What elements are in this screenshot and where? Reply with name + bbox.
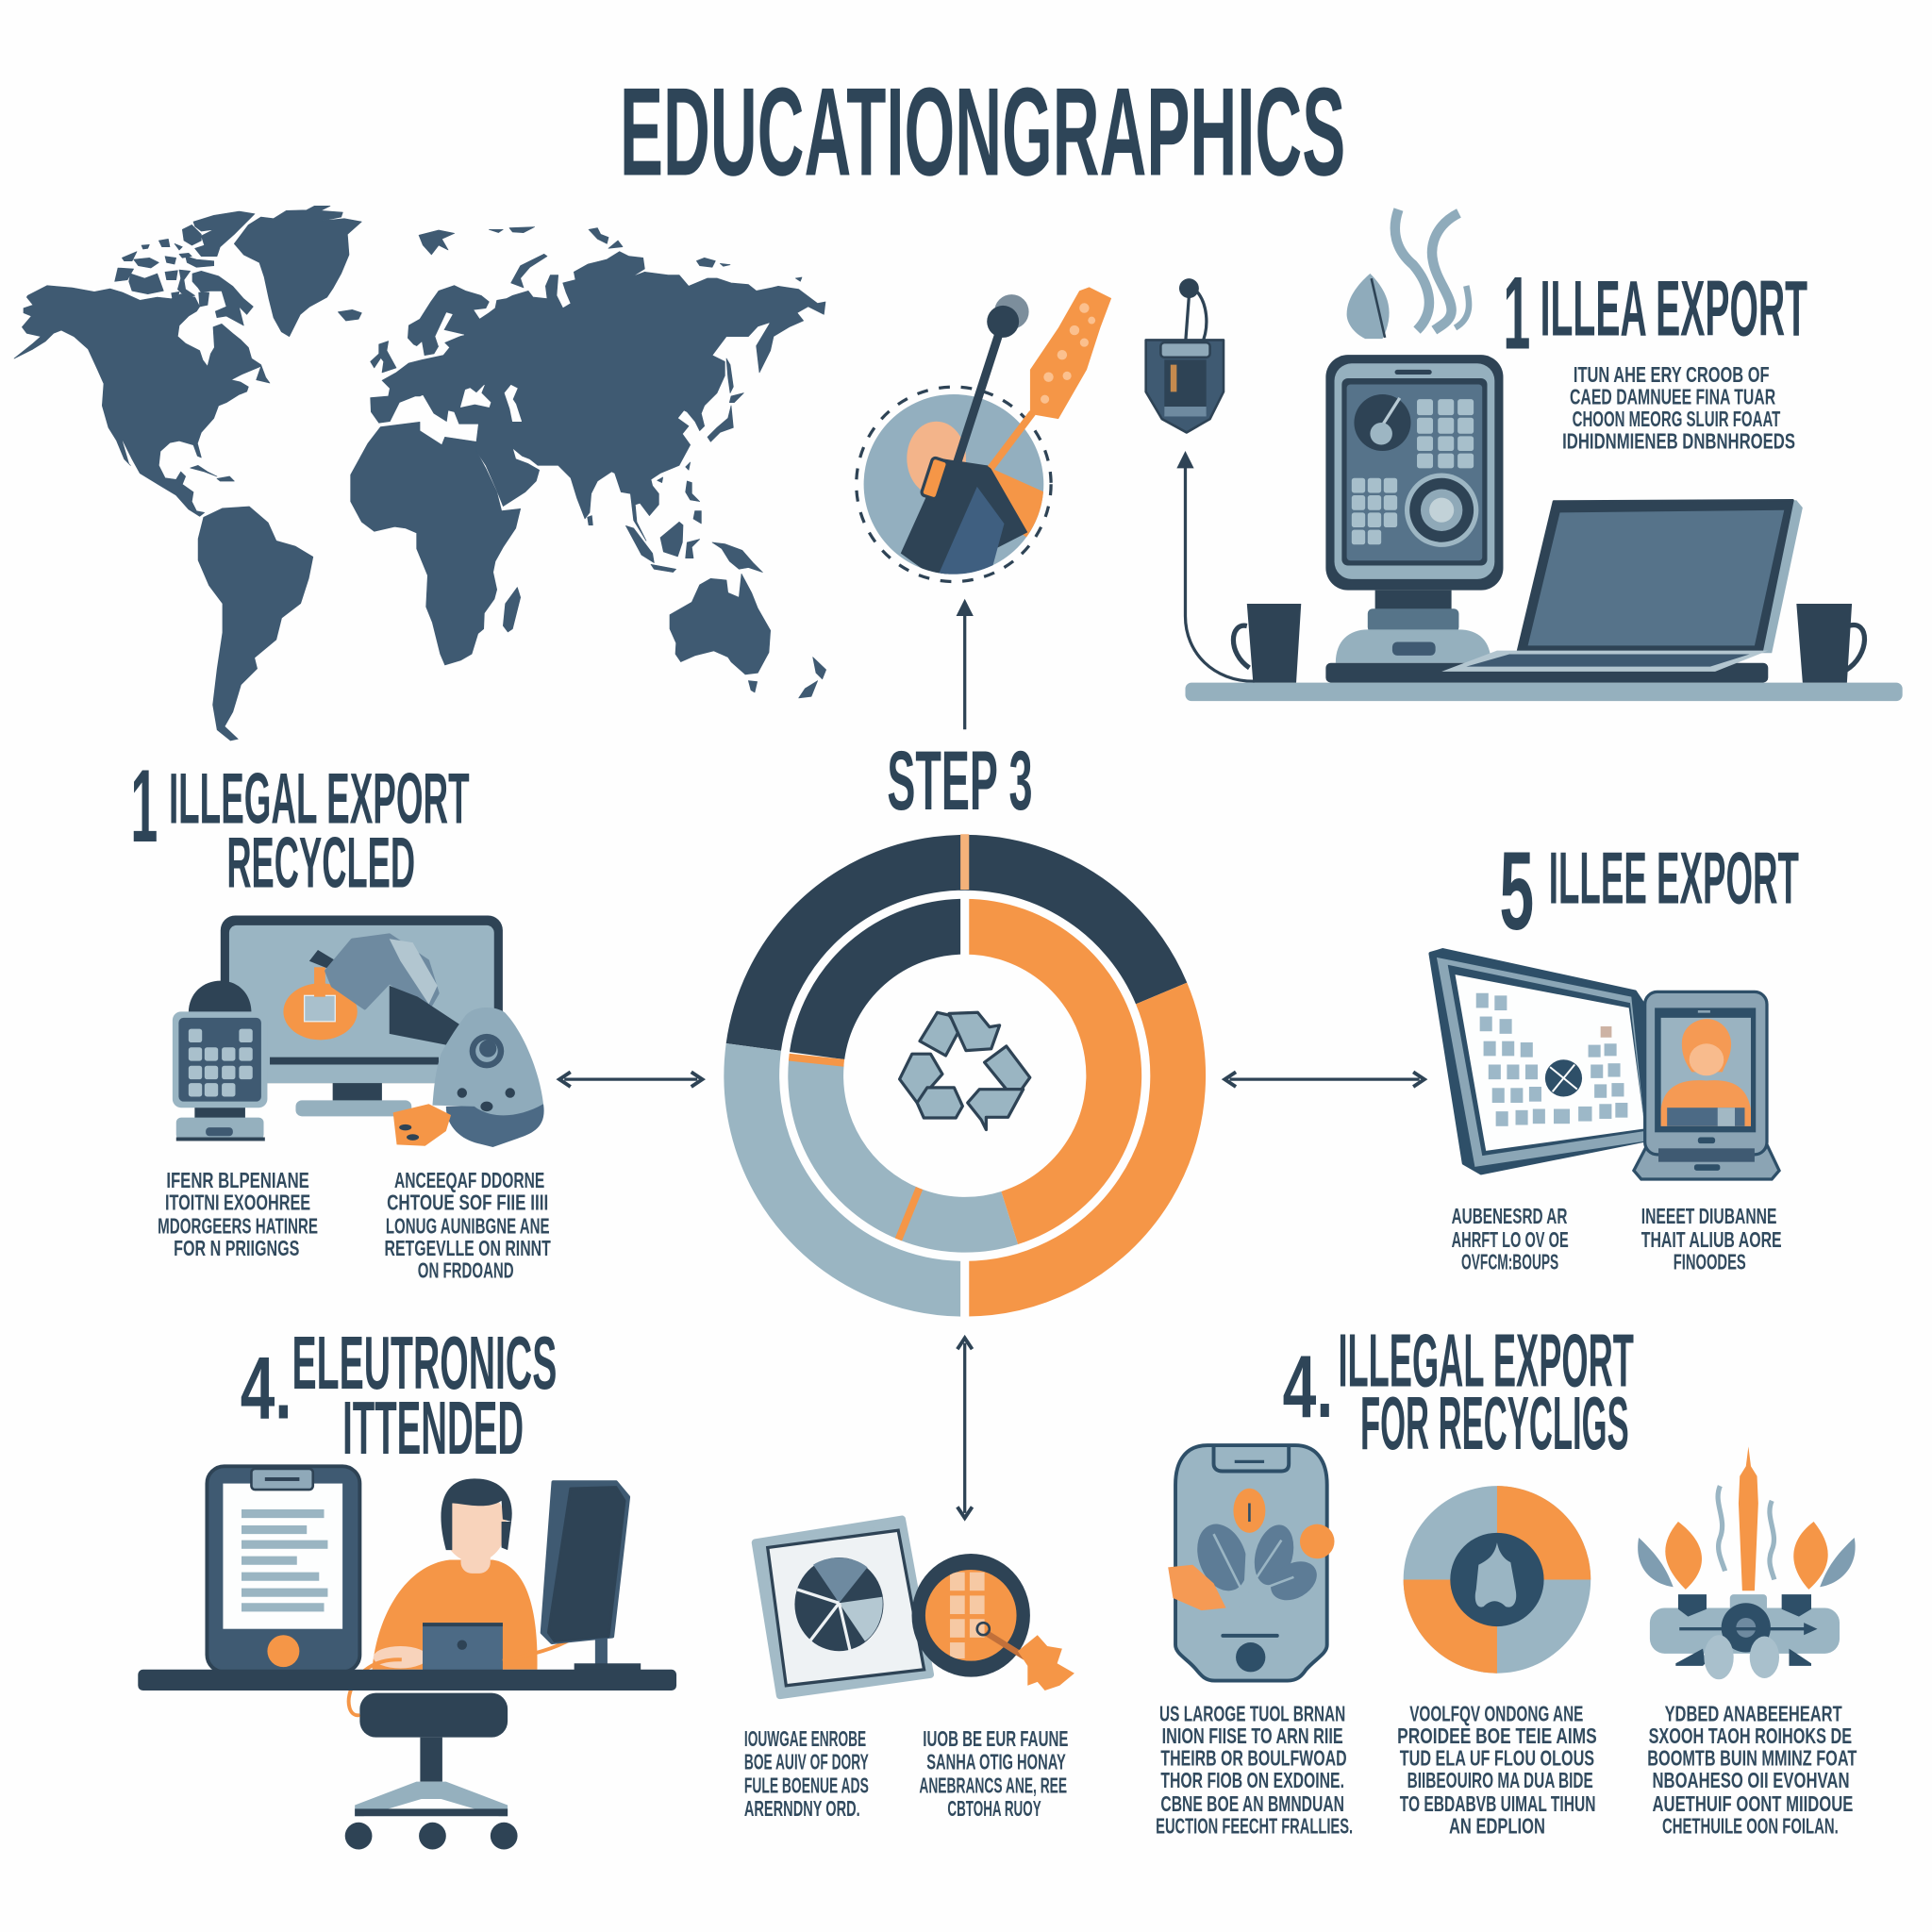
icon: maple leaf [1018,1635,1074,1690]
icon: orange leaf [393,1104,451,1146]
text block: bottom right column two [1397,1702,1597,1839]
heading: illegal export for recycligs [1283,1318,1634,1465]
text block: bottom right column one: US LAROGE TUOL BRNAN [1159,1702,1345,1726]
icon: laptop [1325,500,1803,683]
heading: illegal export for recycligs: 4. [1283,1337,1333,1436]
text block: left column two: CHTOUE SOF FIIE IIII [387,1191,548,1215]
text block: right column two [1641,1204,1782,1274]
map: inland seas [436,313,522,422]
icon: left mug [1233,604,1301,683]
icon: kiosk device [1325,355,1503,663]
text block: left column one [158,1168,318,1260]
text block: right column two: INEEET DIUBANNE [1641,1204,1776,1228]
text block: right column two: FINOODES [1674,1249,1746,1274]
text block: top right: CHOON MEORG SLUIR FOAAT [1573,407,1780,431]
text block: bottom right column three [1647,1702,1857,1839]
text block: bottom centre column one: IOUWGAE ENROBE [744,1726,866,1751]
text block: bottom right column one: INION FIISE TO ARN RIIE [1162,1724,1343,1748]
icon: terminal [173,981,267,1141]
icon: person [372,1478,538,1670]
icon: cable [349,1639,572,1715]
icon: robot [432,1008,544,1147]
text block: left column one: MDORGEERS HATINRE [158,1213,318,1238]
text block: right column one: OVFCM:BOUPS [1461,1249,1558,1274]
icon: clipboard tablet [207,1466,359,1672]
heading: top right: 1 [1503,257,1530,372]
text block: bottom right column two: PROIDEE BOE TEIE AIMS [1397,1724,1597,1748]
heading: top right [1503,257,1807,372]
text block: bottom right column three: NBOAHESO OII EVOHVAN [1653,1768,1849,1792]
icon: large tablet [1430,950,1647,1173]
text block: bottom right column one: EUCTION FEECHT FRALLIES. [1156,1814,1353,1839]
text block: left column two: ON FRDOAND [418,1257,514,1282]
world map [14,206,826,741]
arrow: device cable [1176,451,1255,681]
text block: bottom right column one [1156,1702,1353,1839]
text block: right column one [1452,1204,1569,1274]
heading: illee export: 5 [1500,829,1534,953]
icon: right mug [1796,604,1865,683]
text block: right column two: THAIT ALIUB AORE [1641,1227,1782,1252]
text block: top right: CAED DAMNUEE FINA TUAR [1570,384,1775,408]
text block: bottom right column one: THEIRB OR BOULFWOAD [1160,1746,1347,1771]
illustration: desk with kiosk and laptop [1185,209,1903,701]
text block: bottom centre column two: SANHA OTIG HONAY [926,1750,1066,1774]
heading: illegal export recycled [130,749,470,903]
illustration: person at desk [138,1466,676,1849]
map: South America [198,507,313,741]
text block: bottom centre column one: FULE BOENUE ADS [744,1773,869,1797]
text block: bottom centre column two: IUOB BE EUR FAUNE [923,1726,1068,1751]
text block: bottom centre column one [744,1726,869,1821]
text block: bottom right column three: YDBED ANABEEHEART [1665,1702,1842,1726]
text block: right column one: AHRFT LO OV OE [1452,1227,1569,1252]
heading: illegal export recycled: RECYCLED [226,823,415,903]
illustration: fan tablet and magnifier [756,1519,1074,1695]
text block: bottom centre column two [919,1726,1068,1821]
step heading: STEP 3 [887,734,1033,827]
donut chart [752,834,1178,1319]
shelf [1185,683,1903,701]
outer ring [752,862,1178,1289]
text block: top right: IDHIDNMIENEB DNBNHROEDS [1562,428,1795,453]
text block: bottom right column three: CHETHUILE OON FOILAN. [1662,1814,1839,1839]
text: ILLEGAL EXPORT [169,758,470,839]
arrow: donut to tool [957,599,974,729]
heading: electronics intended: ITTENDED [342,1386,524,1470]
arrow: donut to left panel [559,1072,702,1087]
icon: monitor [221,915,503,1116]
text block: bottom centre column two: CBTOHA RUOY [947,1796,1041,1821]
text block: bottom right column two: TUD ELA UF FLOU OLOUS [1400,1746,1594,1771]
illustration: tool in dashed circle [857,287,1111,581]
text block: right column one: AUBENESRD AR [1452,1204,1568,1228]
text block: bottom right column one: THOR FIOB ON EXDOINE. [1160,1768,1344,1792]
text: ELEUTRONICS [292,1321,557,1405]
icon: flames and pipe [1638,1446,1856,1679]
inner ring [816,926,1114,1224]
heading: illee export [1500,829,1799,953]
heading: electronics intended [241,1321,557,1470]
text block: left column two: LONUG AUNIBGNE ANE [386,1213,550,1238]
text block: top right [1562,362,1795,453]
arrow: donut to right panel [1224,1072,1424,1087]
text block: left column two [385,1168,551,1282]
text block: bottom right column two: VOOLFQV ONDONG ANE [1409,1702,1583,1726]
text block: bottom centre column one: ARERNDNY ORD. [744,1796,860,1821]
icon: small laptop on desk [423,1623,503,1671]
text block: bottom centre column one: BOE AUIV OF DORY [744,1750,869,1774]
icon: monitor [542,1482,641,1671]
text block: bottom right column two: BIIBEOUIRO MA DUA BIDE [1407,1768,1593,1792]
icon: hanging device [1146,278,1224,432]
text block: bottom right column three: SXOOH TAOH ROIHOKS DE [1649,1724,1852,1748]
text block: left column one: IFENR BLPENIANE [166,1168,309,1192]
heading: electronics intended: 4. [241,1338,292,1437]
desk [138,1670,676,1690]
text block: left column one: FOR N PRIIGNGS [174,1236,299,1260]
icon: phone with leaves [1168,1445,1335,1681]
icon: fan tablet [756,1519,930,1695]
icon: office chair [345,1693,518,1849]
icon: quartered circle [1404,1486,1591,1674]
text block: bottom right column one: CBNE BOE AN BMNDUAN [1160,1791,1344,1816]
text block: bottom centre column two: ANEBRANCS ANE, REE [919,1773,1067,1797]
map: Americas west and Greenland [14,206,361,516]
heading: illegal export recycled: 1 [130,749,158,864]
icon: recycle symbol [900,1012,1030,1130]
text block: left column two: ANCEEQAF DDORNE [394,1168,544,1192]
text block: bottom right column two: TO EBDABVB UIMAL TIHUN [1400,1791,1595,1816]
text block: left column one: ITOITNI EXOOHREE [165,1191,310,1215]
map: Eurasia, Africa and Oceania [351,227,826,698]
icon: small laptop [1634,991,1779,1179]
text block: top right: ITUN AHE ERY CROOB OF [1574,362,1770,387]
text block: bottom right column two: AN EDPLION [1449,1814,1545,1839]
illustration: tablet and small laptop [1430,950,1779,1179]
icon: magnifier [912,1554,1030,1677]
icon: steam and leaf [1347,209,1469,339]
text block: bottom right column three: AUETHUIF OONT MIIDOUE [1653,1791,1853,1816]
arrow: donut to bottom panel [958,1338,973,1518]
illustration: monitor, terminal and robot [173,915,544,1147]
text block: left column two: RETGEVLLE ON RINNT [385,1236,551,1260]
